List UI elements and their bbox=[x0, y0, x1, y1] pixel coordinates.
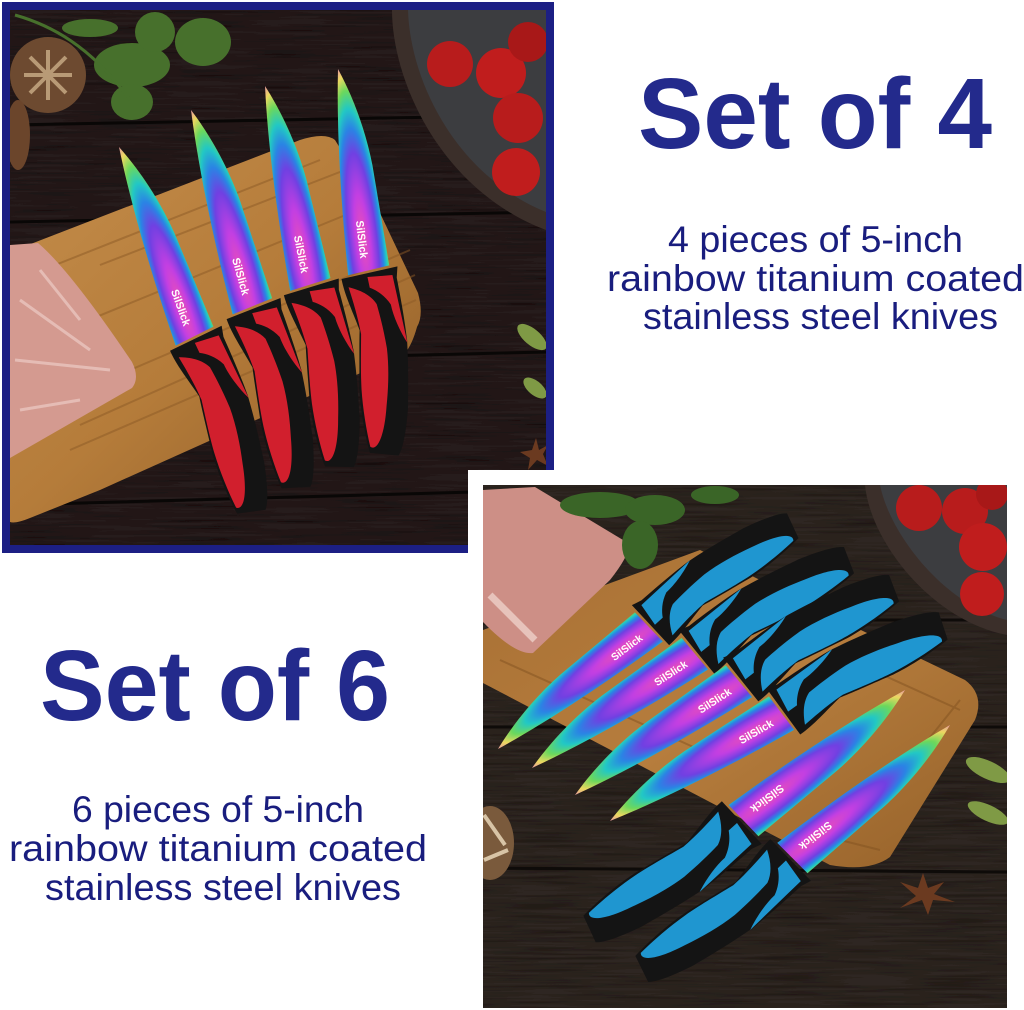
icon: asparagus bbox=[517, 324, 546, 398]
panel frame bbox=[2, 2, 554, 553]
meat bbox=[10, 243, 136, 458]
text block: set of 4 description: stainless steel knives bbox=[643, 296, 998, 337]
knife 2 bbox=[191, 110, 314, 488]
text block: set of 6 description: 6 pieces of 5-inch bbox=[72, 789, 364, 830]
icon: mushroom bbox=[483, 806, 514, 880]
icon: herbs bbox=[15, 12, 231, 120]
dark wood table bbox=[483, 485, 1007, 1008]
icon: asparagus bbox=[966, 757, 1007, 825]
heading: set of 4: Set of 4 bbox=[638, 58, 992, 170]
cutting board bbox=[10, 136, 421, 522]
knife 1 bbox=[498, 514, 798, 749]
knife 2 bbox=[532, 547, 854, 768]
text block: set of 6 description: stainless steel knives bbox=[45, 867, 401, 908]
icon: herbs bbox=[560, 486, 739, 569]
knife 3 bbox=[265, 86, 360, 467]
icon: mushroom bbox=[6, 37, 86, 170]
text block: set of 4 description bbox=[607, 219, 1024, 337]
knife 6 bbox=[636, 725, 950, 982]
icon: plate with tomatoes bbox=[865, 478, 1008, 635]
icon: plate with tomatoes bbox=[392, 10, 548, 230]
text block: set of 6 description bbox=[9, 789, 427, 908]
cutting board bbox=[483, 550, 978, 867]
text block: set of 6 description: rainbow titanium coated bbox=[9, 828, 427, 869]
icon: star anise bbox=[900, 873, 955, 915]
knife 1 bbox=[119, 147, 268, 514]
text block: set of 4 description: 4 pieces of 5-inch bbox=[668, 219, 963, 260]
text block: set of 4 description: rainbow titanium coated bbox=[607, 258, 1024, 299]
knife 5 bbox=[584, 690, 905, 942]
panel: set of 6 photo bbox=[466, 478, 1014, 1008]
knife 3 bbox=[575, 575, 899, 795]
panel: set of 4 photo bbox=[2, 2, 554, 553]
meat bbox=[483, 487, 629, 653]
knife 4 bbox=[610, 612, 948, 821]
dark wood table bbox=[10, 10, 546, 545]
icon: star anise bbox=[520, 438, 548, 470]
knife 4 bbox=[338, 69, 408, 456]
heading: set of 6: Set of 6 bbox=[40, 630, 390, 742]
